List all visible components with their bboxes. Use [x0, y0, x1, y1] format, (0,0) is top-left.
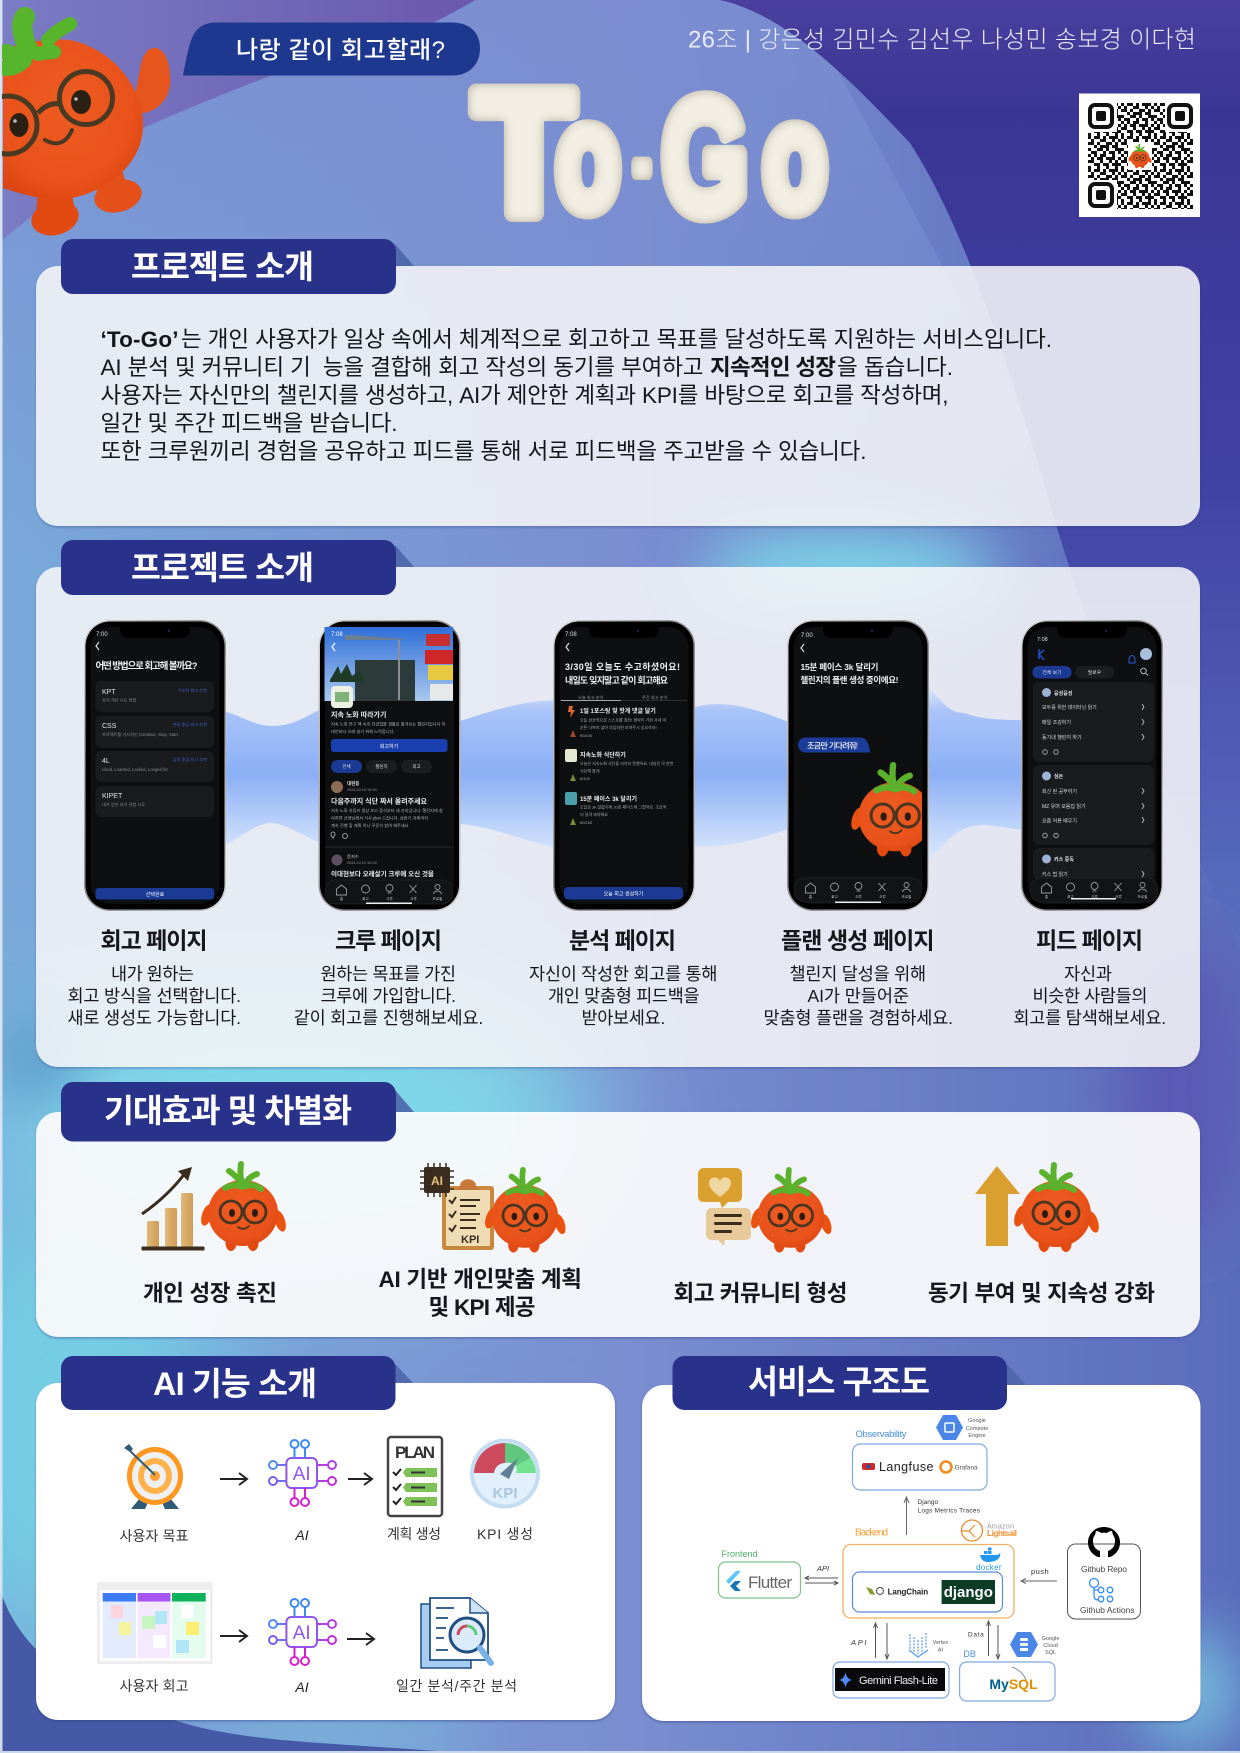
phone: retrospective: Liked, Learned, Lacked, Longed for	[102, 767, 168, 772]
arrow	[347, 1633, 374, 1645]
Google Cloud SQL: SQL	[1045, 1650, 1056, 1656]
frontend group: Flutter	[748, 1573, 792, 1592]
phone: retrospective: KIPET	[102, 793, 123, 800]
phone: analysis: 3/30일 오늘도 수고하셨어요!	[565, 661, 680, 672]
caption: analysis page: 자신이 작성한 회고를 통해	[529, 964, 718, 984]
arrow: logs to observability: Django	[918, 1499, 938, 1506]
observability group: Google	[968, 1418, 986, 1424]
effect: community: 회고 커뮤니티 형성	[674, 1281, 848, 1306]
caption: plan page: 플랜 생성 페이지	[781, 928, 935, 954]
header: service architecture: 서비스 구조도	[748, 1364, 930, 1400]
observability group: Langfuse	[879, 1460, 934, 1474]
phone: retrospective: 어떤 방법으로 회고해 볼까요?	[96, 660, 198, 672]
intro paragraph: 또한 크루원끼리 경험을 공유하고 피드를 통해 서로 피드백을 주고받을 수 있습니다.	[100, 439, 866, 464]
caption: crew page: 크루 페이지	[335, 928, 442, 954]
arrow: logs to observability: Logs Metrics Traces	[918, 1508, 981, 1514]
intro paragraph: 지속적인 성장	[710, 355, 836, 380]
phone: feed: 전체 보기	[1042, 669, 1062, 676]
phone: feed: 회신 된 공부하기	[1042, 788, 1077, 795]
header: expected effects	[61, 1082, 396, 1142]
phone: analysis: 내일도 잊지말고 같이 회고해요	[565, 674, 668, 686]
phone: retrospective: 내가 얻은 지식 경험 시도	[102, 801, 145, 808]
Vertex AI	[909, 1633, 948, 1657]
caption: retrospective page	[68, 928, 241, 1028]
arrow: push	[1021, 1567, 1057, 1584]
phone: crew: 2024.10.10 10:33	[347, 788, 377, 792]
phone: crew: 지속 노화 연구 책 속의 건강법을 생활로 옮겨보는 챌린지입니다 지	[331, 720, 446, 728]
title logo: To-Go: o	[763, 75, 827, 241]
caption: plan page	[764, 928, 953, 1028]
Gemini box: Gemini Flash-Lite	[859, 1675, 938, 1687]
panel: AI features	[36, 1356, 615, 1720]
Vertex AI: Vertex	[933, 1640, 948, 1646]
icon: KPI gauge	[470, 1438, 540, 1508]
phone: plan generation	[787, 620, 943, 911]
caption: plan page: AI가 만들어준	[808, 986, 909, 1006]
phone: feed: 키스 법 읽기	[1042, 871, 1068, 878]
Google Cloud SQL: Google	[1042, 1636, 1059, 1642]
Vertex AI: AI	[938, 1648, 943, 1654]
caption: retrospective page: 새로 생성도 가능합니다.	[68, 1008, 241, 1028]
header: AI features: AI 기능 소개	[153, 1366, 317, 1402]
phone: plan generation: 15분 페이스 3k 달리기	[800, 662, 878, 672]
phone: analysis: 90/100	[580, 733, 593, 738]
label: user goal: 사용자 목표	[120, 1528, 189, 1544]
caption: analysis page: 개인 맞춤형 피드백을	[548, 986, 700, 1006]
GitHub group: Github Repo	[1081, 1564, 1127, 1574]
header: app screens: 프로젝트 소개	[131, 550, 314, 586]
QR code	[1079, 94, 1200, 217]
Google Cloud SQL	[1010, 1632, 1059, 1657]
caption: feed page: 피드 페이지	[1036, 928, 1143, 954]
phone: crew: 대언보다 오래 살기 위해 노력합니다	[331, 728, 394, 735]
header: app screens	[61, 540, 396, 595]
phone: crew: 지속 노화 따라가기	[331, 710, 386, 719]
phone: crew: 챌린지	[375, 763, 388, 770]
intro paragraph: ‘To-Go’	[100, 327, 178, 352]
arrows: database: DB	[963, 1649, 976, 1659]
icon: plan checklist: PLAN	[395, 1443, 435, 1462]
intro paragraph: 는 개인 사용자가 일상 속에서 체계적으로 회고하고 목표를 달성하도록 지원하는 서비스입니다.	[181, 327, 1052, 352]
caption: retrospective page: 회고 방식을 선택합니다.	[68, 986, 241, 1006]
arrows: API frontend-backend: API	[816, 1564, 829, 1573]
label: user retrospective: 사용자 회고	[120, 1678, 189, 1694]
caption: analysis page: 분석 페이지	[569, 928, 676, 954]
caption: crew page	[294, 928, 483, 1028]
effect: AI plan and KPI	[378, 1163, 582, 1320]
caption: crew page: 크루에 가입합니다.	[320, 986, 456, 1006]
backend group: Backend	[855, 1528, 888, 1538]
image: user retrospective board	[97, 1582, 212, 1664]
phone: analysis: 1일 1포스팅 및 핫게 댓글 달기	[580, 707, 656, 715]
caption: feed page: 비슷한 사람들의	[1032, 986, 1148, 1006]
section header fold triangles	[395, 244, 1026, 1385]
title logo: To-Go: T	[474, 55, 574, 250]
phone: plan generation: 7:00	[801, 633, 813, 639]
effect: AI plan and KPI: AI	[431, 1174, 443, 1188]
arrows: API gemini-backend	[850, 1623, 889, 1659]
header: project intro: 프로젝트 소개	[131, 249, 314, 285]
MySQL box: MySQL	[989, 1676, 1038, 1692]
caption: feed page: 자신과	[1064, 964, 1112, 984]
phone: crew: 대현용	[347, 780, 359, 787]
phone: plan generation: 챌린지의 플랜 생성 중이에요!	[800, 675, 899, 685]
phone: feed: 융성융성	[1054, 690, 1073, 697]
phone: crew	[318, 620, 460, 911]
label: daily and weekly analysis: 일간 분석/주간 분석	[396, 1678, 517, 1694]
effect: AI plan and KPI: 및 KPI 제공	[428, 1295, 536, 1320]
observability group: Grafana	[955, 1464, 978, 1472]
icon: plan checklist	[388, 1437, 442, 1516]
effect: growth	[142, 1164, 288, 1306]
arrow: logs to observability	[904, 1497, 981, 1535]
arrows: API frontend-backend	[805, 1564, 838, 1585]
caption: crew page: 원하는 목표를 가진	[320, 964, 456, 984]
phone: feed: 7:08	[1037, 637, 1048, 643]
label: plan generation: 계획 생성	[387, 1526, 441, 1542]
Gemini box	[833, 1662, 949, 1698]
team names: 26조 | 강은성 김민수 김선우 나성민 송보경 이다현	[688, 26, 1196, 54]
backend group: django	[944, 1584, 993, 1601]
screen captions	[68, 928, 1166, 1028]
phone: retrospective: 프로젝트를 가시적인 Continue, Stop, Start	[102, 731, 179, 738]
phone: analysis: 60/100	[580, 820, 593, 825]
observability group: Engine	[968, 1433, 986, 1439]
label: AI: AI	[294, 1679, 309, 1695]
phone: feed: 팔로우	[1088, 669, 1102, 676]
phone: feed: 심돈	[1054, 773, 1064, 780]
frontend group: Frontend	[722, 1549, 758, 1559]
panel: project intro	[36, 239, 1200, 526]
phone: analysis: 식단해 볼게	[580, 768, 600, 774]
phone: crew: 윤지수	[347, 853, 359, 860]
header: service architecture	[672, 1356, 1007, 1410]
arrow	[220, 1630, 247, 1642]
phone: analysis: 오늘은 지속노화 식단을 지키지 못했어요. 내일은 꼭 한번	[580, 760, 674, 766]
phone: crew: 지속 노화 유튜브 영상 보고 음식부터 세 가지입니다. 챌린지에 참	[331, 807, 443, 814]
phone: feed	[1021, 620, 1163, 911]
panel: app screens	[36, 540, 1200, 1067]
arrow	[348, 1473, 372, 1485]
icon: AI chip	[269, 1440, 336, 1506]
intro paragraph: 을 돕습니다.	[837, 355, 953, 380]
phone: analysis: 오늘 성공적으로 스스로를 칭찬! 생략이 기한 사내 미	[580, 716, 666, 722]
Google Cloud SQL: Cloud	[1043, 1643, 1058, 1649]
phone: feed: 매일 조깅하기	[1042, 719, 1071, 726]
icon: KPI gauge: KPI	[492, 1485, 518, 1502]
phone: plan generation: 조금만 기다려줘!	[807, 740, 858, 750]
backend group: Amazon	[987, 1524, 1014, 1530]
phone: retrospective: 4L	[102, 758, 110, 765]
arrows: database	[963, 1621, 1000, 1659]
caption: plan page: 챌린지 달성을 위해	[790, 964, 926, 984]
effect: motivation: 동기 부여 및 지속성 강화	[928, 1281, 1155, 1306]
phone: analysis: 오늘은 3k 달렸기에 20분 페이스에 그쳤어요. 조금씩	[580, 804, 667, 810]
phone: analysis: 더 달려 봐야해요	[580, 811, 608, 817]
phone: analysis: 지속노화 식단하기	[580, 751, 626, 759]
wave band behind phones	[200, 687, 1030, 865]
GitHub group	[1068, 1527, 1140, 1619]
arrows: database: Data	[968, 1632, 984, 1638]
backend group	[843, 1520, 1017, 1618]
header: project intro	[61, 239, 396, 294]
panel: service architecture	[642, 1356, 1200, 1721]
title logo: To-Go: -	[634, 118, 650, 207]
phone: analysis: 오늘 회고 분석	[578, 694, 604, 701]
phone: analysis: 7:08	[565, 632, 577, 638]
phone: retrospective: 7:00	[96, 632, 108, 638]
effect: AI plan and KPI: KPI	[461, 1234, 479, 1246]
phone: crew: 2024.10.10 10:03	[347, 861, 377, 865]
intro paragraph: AI 분석 및 커뮤니티 기 능을 결합해 회고 작성의 동기를 부여하고	[100, 355, 704, 380]
phone: retrospective: 감정 중심 회고 추천	[173, 756, 207, 763]
phone: analysis: 주간 회고 분석	[642, 694, 668, 701]
frontend group	[718, 1549, 800, 1598]
GitHub group: Github Actions	[1080, 1605, 1134, 1615]
icon: report analysis	[421, 1598, 491, 1668]
observability group: Observability	[856, 1429, 907, 1440]
caption: crew page: 같이 회고를 진행해보세요.	[294, 1008, 483, 1028]
phone: analysis	[553, 620, 695, 911]
intro paragraph: 사용자는 자신만의 챌린지를 생성하고, AI가 제안한 계획과 KPI를 바탕으로 회고를 작성하며,	[100, 383, 948, 408]
phone: crew: 이대현보다 오래살기 크루에 오신 것을	[331, 869, 434, 878]
phone: feed: 키스 중독	[1054, 856, 1074, 863]
icon: AI chip	[269, 1599, 336, 1665]
backend group: Lightsail	[987, 1528, 1017, 1538]
phone: retrospective: 선택완료	[146, 891, 165, 898]
phone: retrospective: 구조적 회고 추천	[178, 687, 207, 694]
phone: retrospective	[84, 620, 226, 911]
phone: feed: 모두를 위한 데이터닝 읽기	[1042, 704, 1097, 711]
caption: analysis page: 받아보세요.	[582, 1008, 665, 1028]
effect: community	[674, 1168, 848, 1306]
phone: crew: 7:08	[331, 632, 343, 638]
phone: crew: 회고하기	[380, 743, 398, 750]
phone: retrospective: 유지 개선 시도 방법	[102, 696, 136, 704]
intro paragraph: 일간 및 주간 피드백을 받습니다.	[100, 411, 398, 436]
MySQL box	[960, 1662, 1055, 1701]
phone: retrospective: 변화 중심 회고 추천	[173, 721, 207, 728]
phone: analysis: 순튼 나쁘지 않아 부담되면 보여주시 승부하자!	[580, 724, 657, 730]
caption: feed page	[1013, 928, 1166, 1028]
caption: plan page: 맞춤형 플랜을 경험하세요.	[764, 1008, 953, 1028]
arrows: API gemini-backend: API	[850, 1638, 866, 1647]
arrow	[220, 1473, 247, 1485]
caption: feed page: 회고를 탐색해보세요.	[1013, 1008, 1166, 1028]
phone: analysis: 15분 페이스 3k 달리기	[580, 795, 637, 803]
header: AI features	[61, 1356, 396, 1410]
panel: expected effects	[36, 1082, 1200, 1337]
label: AI: AI	[294, 1527, 309, 1543]
title logo: To-Go	[474, 55, 827, 250]
phone: analysis: 6/100	[580, 776, 591, 781]
caption: retrospective page: 회고 페이지	[100, 928, 208, 954]
backend group: LangChain	[888, 1588, 928, 1596]
phone: retrospective: CSS	[102, 723, 117, 730]
phone: feed: 동기내 챌린지 하기	[1042, 734, 1082, 741]
intro paragraph	[100, 327, 1052, 464]
arrow: push: push	[1031, 1567, 1049, 1576]
effect: growth: 개인 성장 촉진	[143, 1281, 277, 1306]
phone: crew: 계속 진행 할 계획 이니 꾸준히 참여 해주세요	[331, 822, 409, 829]
phone: crew: 다음주까지 식단 짜서 올려주세요	[331, 796, 428, 806]
effect: AI plan and KPI: AI 기반 개인맞춤 계획	[378, 1267, 582, 1292]
title logo: To-Go: G	[662, 66, 748, 248]
phone: crew: 회고	[412, 763, 421, 770]
observability group: Compute	[966, 1426, 988, 1432]
phone: feed: 요즘 어른 배우기	[1042, 818, 1077, 824]
hero tomato mascot	[0, 17, 170, 240]
tagline pill	[183, 22, 480, 76]
phone: retrospective: KPT	[102, 689, 116, 696]
label: KPI generation: KPI 생성	[477, 1526, 533, 1542]
header: expected effects: 기대효과 및 차별화	[104, 1093, 352, 1129]
caption: analysis page	[529, 928, 718, 1028]
phone: crew: 여하면 선생님께서 식사 plan 드립니다. 상반기 과제까지	[331, 814, 428, 822]
observability group	[852, 1415, 988, 1490]
tagline pill: 나랑 같이 회고할래?	[236, 37, 445, 64]
icon: target	[124, 1444, 183, 1509]
phone: crew: 전체	[342, 763, 351, 770]
effect: motivation	[928, 1165, 1155, 1306]
phone: analysis: 오늘 회고 생성하기	[604, 890, 643, 898]
phone: feed: MZ 유머 모음집 읽기	[1042, 803, 1086, 810]
backend group: docker	[976, 1563, 1002, 1572]
caption: retrospective page: 내가 원하는	[111, 964, 194, 984]
title logo: To-Go: o	[556, 75, 620, 241]
